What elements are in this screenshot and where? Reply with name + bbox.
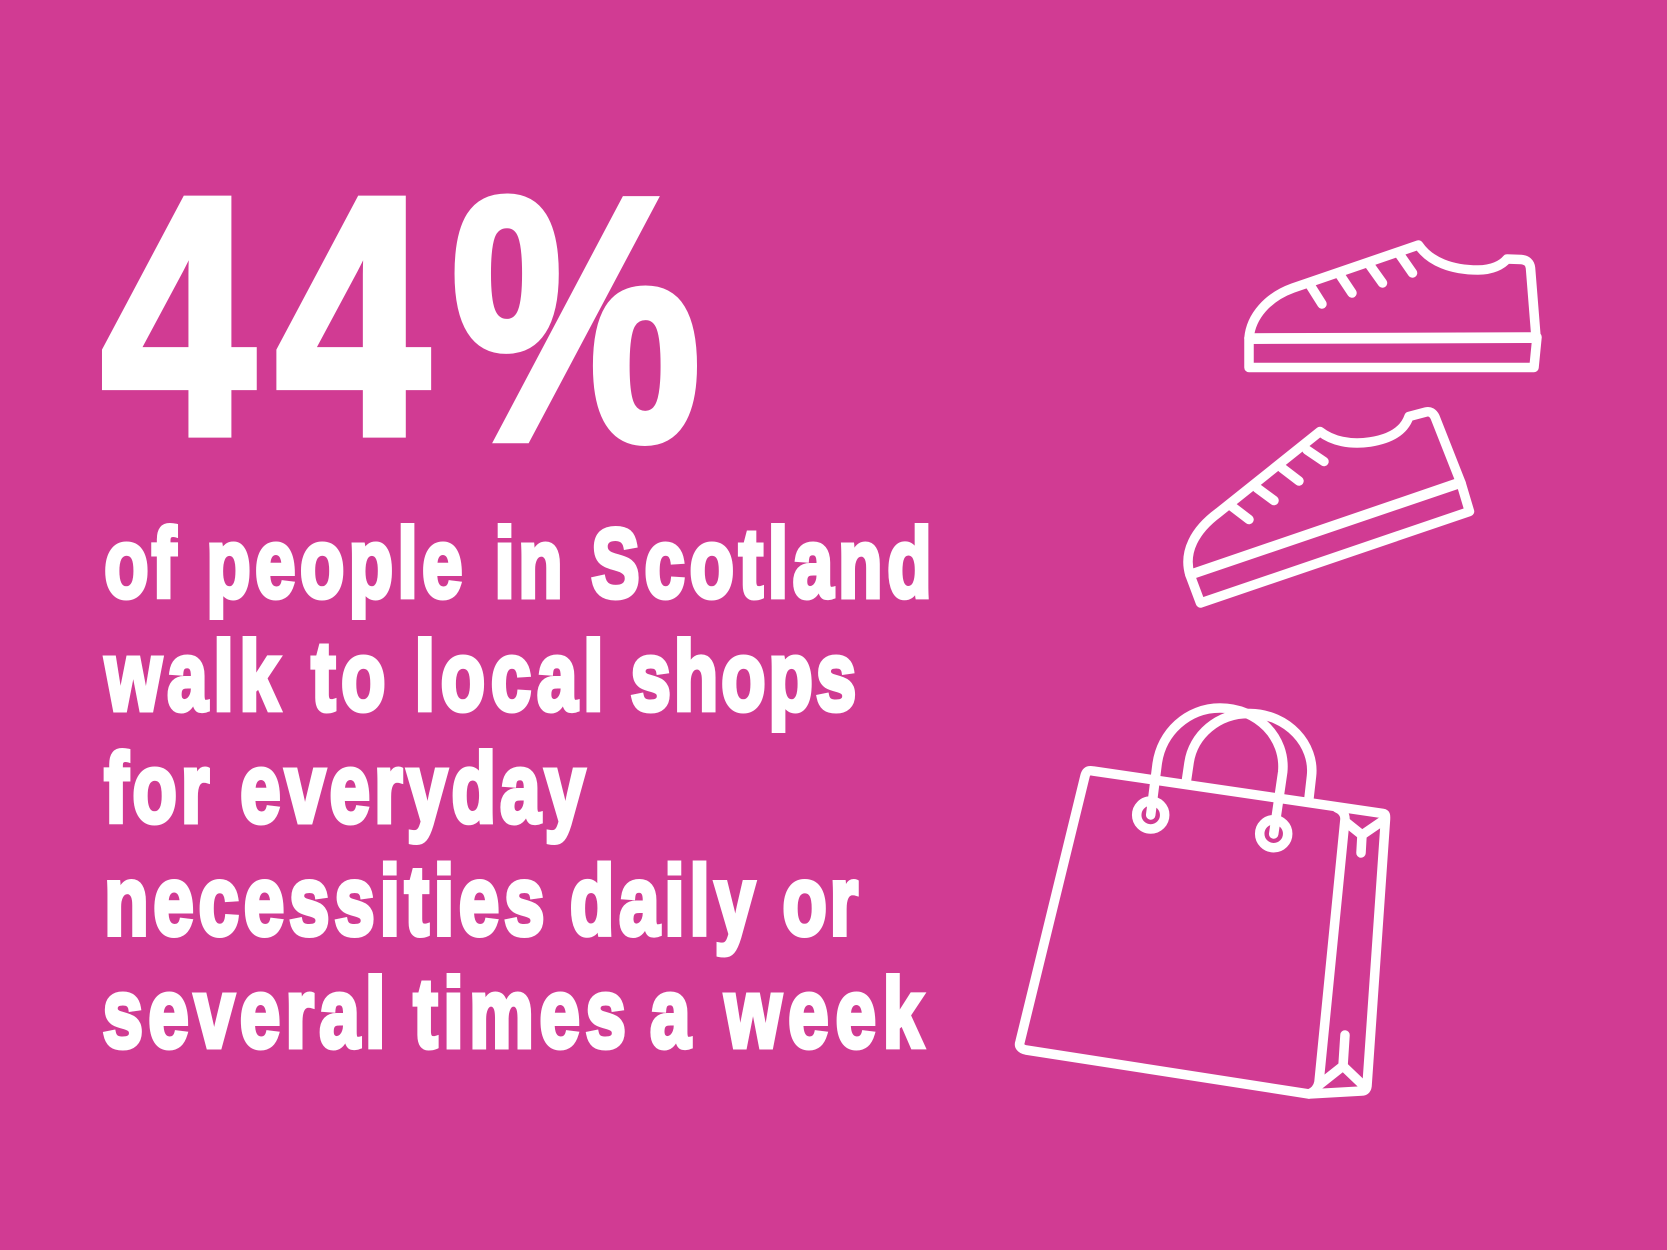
description text: shops [630, 622, 856, 732]
description text: in [494, 509, 563, 619]
headline statistic: 44%: 4 [101, 126, 257, 506]
icon: shopping bag [1020, 708, 1386, 1094]
description text: week [724, 959, 924, 1069]
description text: to [311, 622, 385, 732]
description text: or [782, 847, 858, 956]
description text: for [104, 734, 209, 844]
description text: times [414, 959, 626, 1069]
description text: necessities [104, 847, 545, 956]
description text: local [415, 622, 603, 732]
headline statistic: 44%: % [451, 125, 701, 513]
description text: people [206, 509, 462, 619]
description text: daily [570, 847, 755, 956]
description text: Scotland [591, 509, 932, 619]
description text: everyday [240, 734, 585, 844]
description text: several [103, 959, 385, 1069]
description text: a [650, 959, 691, 1069]
icon: upper shoe [1249, 245, 1537, 368]
headline statistic: 44% [101, 125, 701, 513]
eyelets [1137, 801, 1288, 848]
description text [103, 509, 932, 1069]
description text: walk [104, 622, 281, 732]
headline statistic: 44%: 4 [276, 126, 431, 506]
handles [1151, 708, 1312, 834]
description text: of [104, 509, 176, 619]
icon: lower shoe [1188, 412, 1470, 603]
